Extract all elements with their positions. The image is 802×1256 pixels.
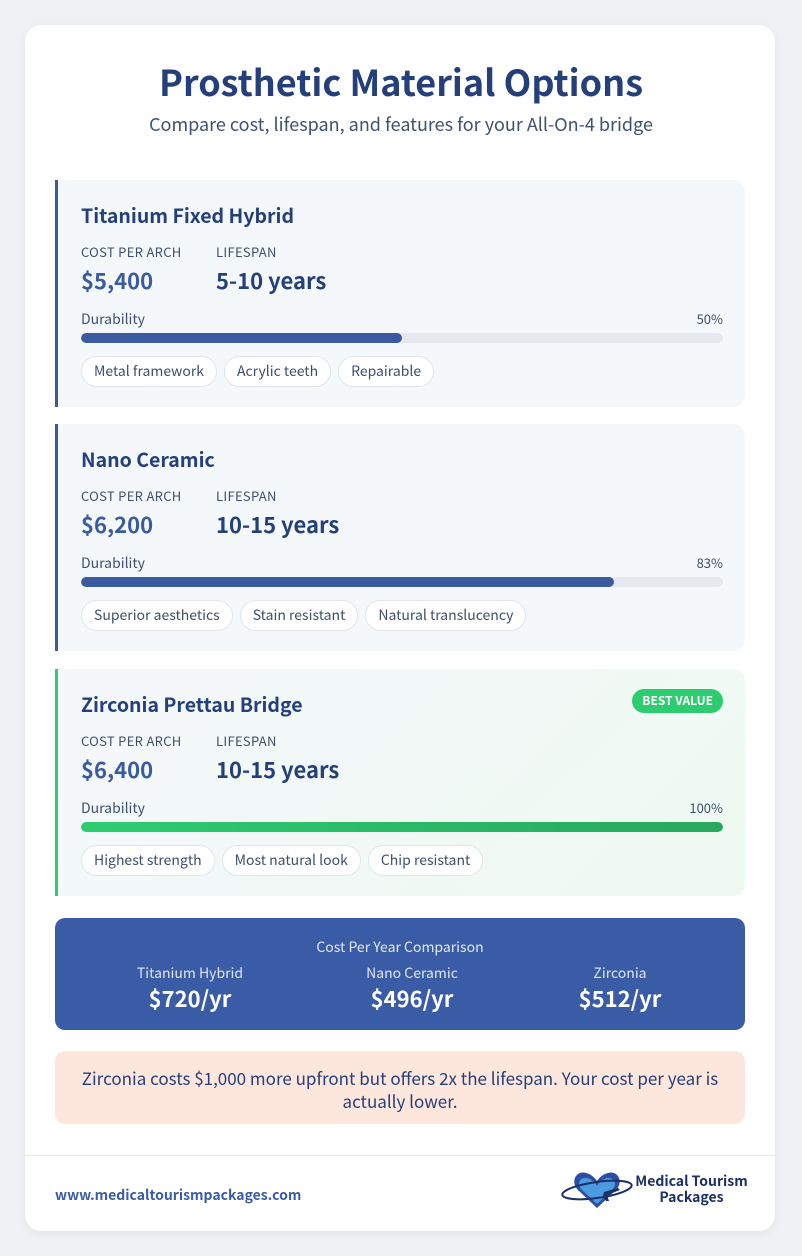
- panel: titanium: LIFESPAN: [216, 242, 277, 261]
- panel: zirconia: 100%: [689, 798, 723, 817]
- tags: Metal framework: [94, 361, 204, 381]
- tags: Stain resistant: [253, 605, 345, 625]
- tags: [81, 845, 483, 876]
- durability bar: [81, 822, 723, 832]
- panel: zirconia: Durability: [81, 798, 145, 818]
- panel: cost per year: [55, 918, 745, 1030]
- panel: nano ceramic: 10-15 years: [216, 508, 339, 540]
- durability bar: [81, 577, 723, 587]
- panel: cost per year: Cost Per Year Comparison: [316, 937, 484, 957]
- tags: Repairable: [351, 361, 421, 381]
- durability bar: [81, 333, 723, 343]
- panel: zirconia: [55, 669, 745, 896]
- icon: heart with plane: [561, 1173, 633, 1208]
- panel: nano ceramic: COST PER ARCH: [81, 486, 182, 505]
- panel: zirconia: LIFESPAN: [216, 731, 277, 750]
- footer url: www.medicaltourismpackages.com: [55, 1185, 301, 1205]
- panel: titanium: 50%: [697, 309, 723, 328]
- panel: cost per year: Zirconia: [593, 963, 647, 983]
- panel: nano ceramic: 83%: [697, 553, 723, 572]
- tags: Superior aesthetics: [94, 605, 220, 625]
- tags: Natural translucency: [378, 605, 513, 625]
- panel: cost per year: $496/yr: [371, 982, 453, 1014]
- panel: titanium: COST PER ARCH: [81, 242, 182, 261]
- panel: titanium: 5-10 years: [216, 264, 326, 296]
- panel: cost per year: $512/yr: [579, 982, 661, 1014]
- logo: Medical Tourism: [635, 1171, 748, 1191]
- panel: titanium: Titanium Fixed Hybrid: [81, 200, 294, 229]
- title: Prosthetic Material Options: [159, 55, 643, 107]
- panel: cost per year: Titanium Hybrid: [137, 963, 243, 983]
- logo: Packages: [659, 1187, 724, 1207]
- logo: [561, 1171, 748, 1208]
- panel: zirconia: 10-15 years: [216, 753, 339, 785]
- panel: titanium: [55, 180, 745, 407]
- panel: zirconia: COST PER ARCH: [81, 731, 182, 750]
- panel: nano ceramic: [55, 424, 745, 651]
- panel: nano ceramic: $6,200: [81, 508, 153, 540]
- tags: Highest strength: [94, 850, 202, 870]
- tags: Acrylic teeth: [237, 361, 318, 381]
- panel: cost per year: $720/yr: [149, 982, 231, 1014]
- tags: Chip resistant: [381, 850, 470, 870]
- panel: nano ceramic: LIFESPAN: [216, 486, 277, 505]
- panel: cost per year: Nano Ceramic: [366, 963, 458, 983]
- tags: Most natural look: [235, 850, 348, 870]
- panel: titanium: Durability: [81, 309, 145, 329]
- panel: nano ceramic: Nano Ceramic: [81, 444, 215, 473]
- callout note: [55, 1051, 745, 1124]
- panel: zirconia: Zirconia Prettau Bridge: [81, 689, 303, 718]
- panel: nano ceramic: Durability: [81, 553, 145, 573]
- tags: [81, 356, 434, 387]
- tags: [81, 600, 526, 631]
- badge: best value: BEST VALUE: [642, 692, 713, 709]
- panel: zirconia: $6,400: [81, 753, 153, 785]
- badge: best value: [632, 689, 723, 713]
- callout note: Zirconia costs $1,000 more upfront but offers 2x the lifespan. Your cost per year is actually lower.: [82, 1065, 718, 1113]
- panel: titanium: $5,400: [81, 264, 153, 296]
- subtitle: Compare cost, lifespan, and features for your All-On-4 bridge: [149, 111, 653, 137]
